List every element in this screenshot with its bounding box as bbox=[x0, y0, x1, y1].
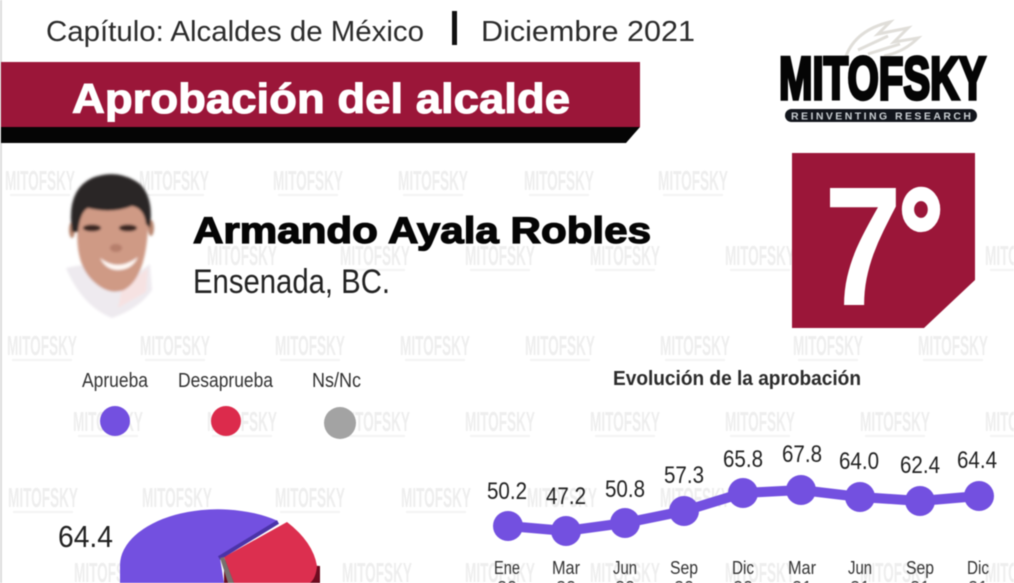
title banner bbox=[1, 62, 640, 143]
watermark pattern: MITOFSKY bbox=[465, 240, 535, 271]
watermark pattern: MITOFSKY bbox=[340, 240, 410, 271]
watermark pattern: MITOFSKY bbox=[725, 240, 795, 271]
Mitofsky logo: REINVENTING RESEARCH bbox=[791, 110, 971, 122]
watermark pattern: MITOFSKY bbox=[398, 165, 468, 196]
watermark pattern: MITOFSKY bbox=[73, 406, 143, 437]
watermark pattern: MITOFSKY bbox=[590, 406, 660, 437]
portrait: Armando Ayala Robles bbox=[66, 174, 154, 318]
watermark pattern: MITOFSKY bbox=[658, 165, 728, 196]
watermark pattern: MITOFSKY bbox=[7, 330, 77, 361]
legend bbox=[82, 370, 361, 439]
line chart: approval evolution: Sep bbox=[670, 558, 698, 578]
header: chapter and date: Diciembre 2021 bbox=[481, 16, 695, 48]
line chart: approval evolution: Ene bbox=[494, 558, 520, 578]
watermark pattern: MITOFSKY bbox=[207, 240, 277, 271]
legend: aprueba: Aprueba bbox=[82, 370, 149, 392]
watermark pattern: MITOFSKY bbox=[273, 165, 343, 196]
rank badge: 7th place bbox=[792, 152, 975, 342]
watermark pattern: MITOFSKY bbox=[660, 482, 730, 513]
header: chapter and date bbox=[46, 11, 695, 48]
line chart: approval evolution: 57.3 bbox=[664, 462, 704, 489]
line chart: approval evolution: 47.2 bbox=[546, 483, 586, 510]
pie value: 64.4 bbox=[58, 519, 113, 554]
legend: ns/nc: Ns/Nc bbox=[312, 370, 361, 392]
line chart: approval evolution: Sep bbox=[906, 558, 934, 578]
watermark pattern: MITOFSKY bbox=[660, 330, 730, 361]
watermark pattern: MITOFSKY bbox=[139, 165, 209, 196]
municipality: Ensenada, BC. bbox=[193, 263, 390, 301]
line chart: approval evolution: Mar bbox=[788, 558, 816, 578]
line chart title: Evolución de la aprobación bbox=[613, 368, 861, 390]
watermark pattern bbox=[5, 165, 1014, 583]
line chart: approval evolution: 50.2 bbox=[487, 478, 527, 505]
line chart: approval evolution: 62.4 bbox=[900, 452, 940, 479]
watermark pattern: MITOFSKY bbox=[525, 330, 595, 361]
rank badge: 7th place: 7 bbox=[824, 152, 902, 342]
watermark pattern: MITOFSKY bbox=[5, 165, 75, 196]
line chart: approval evolution: Jun bbox=[848, 558, 872, 578]
line chart: approval evolution: 65.8 bbox=[723, 446, 763, 473]
line chart: approval evolution: 64.4 bbox=[957, 447, 997, 474]
watermark pattern: MITOFSKY bbox=[524, 165, 594, 196]
legend: desaprueba bbox=[178, 370, 274, 436]
rank badge: 7th place: ° bbox=[899, 161, 943, 309]
pie chart bbox=[58, 509, 320, 583]
watermark pattern: MITOFSKY bbox=[725, 406, 795, 437]
watermark pattern: MITOFSKY bbox=[465, 406, 535, 437]
watermark pattern: MITOFSKY bbox=[140, 330, 210, 361]
line chart: approval evolution: Dic bbox=[967, 558, 989, 578]
watermark pattern: MITOFSKY bbox=[793, 330, 863, 361]
line chart: approval evolution: 64.0 bbox=[839, 448, 879, 475]
title banner: Aprobación del alcalde bbox=[72, 75, 570, 122]
watermark pattern: MITOFSKY bbox=[275, 482, 345, 513]
watermark pattern: MITOFSKY bbox=[207, 406, 277, 437]
line chart: approval evolution: Jun bbox=[613, 558, 637, 578]
line chart: approval evolution bbox=[487, 441, 997, 583]
line chart: approval evolution: Mar bbox=[552, 558, 580, 578]
legend: aprueba bbox=[82, 370, 149, 436]
watermark pattern: MITOFSKY bbox=[860, 406, 930, 437]
watermark pattern: MITOFSKY bbox=[590, 240, 660, 271]
line chart: approval evolution: Dic bbox=[732, 558, 754, 578]
watermark pattern: MITOFSKY bbox=[401, 482, 471, 513]
header: chapter and date: Capítulo: Alcaldes de México bbox=[46, 16, 424, 48]
watermark pattern: MITOFSKY bbox=[8, 482, 78, 513]
candidate name: Armando Ayala Robles bbox=[193, 210, 651, 251]
line chart: approval evolution: 67.8 bbox=[782, 441, 822, 468]
line chart: approval evolution: 50.8 bbox=[605, 476, 645, 503]
watermark pattern: MITOFSKY bbox=[142, 482, 212, 513]
legend: desaprueba: Desaprueba bbox=[178, 370, 274, 392]
watermark pattern: MITOFSKY bbox=[527, 482, 597, 513]
Mitofsky logo bbox=[779, 22, 986, 122]
watermark pattern: MITOFSKY bbox=[400, 330, 470, 361]
watermark pattern: MITOFSKY bbox=[275, 330, 345, 361]
legend: ns/nc bbox=[312, 370, 361, 439]
watermark pattern: MITOFSKY bbox=[340, 406, 410, 437]
